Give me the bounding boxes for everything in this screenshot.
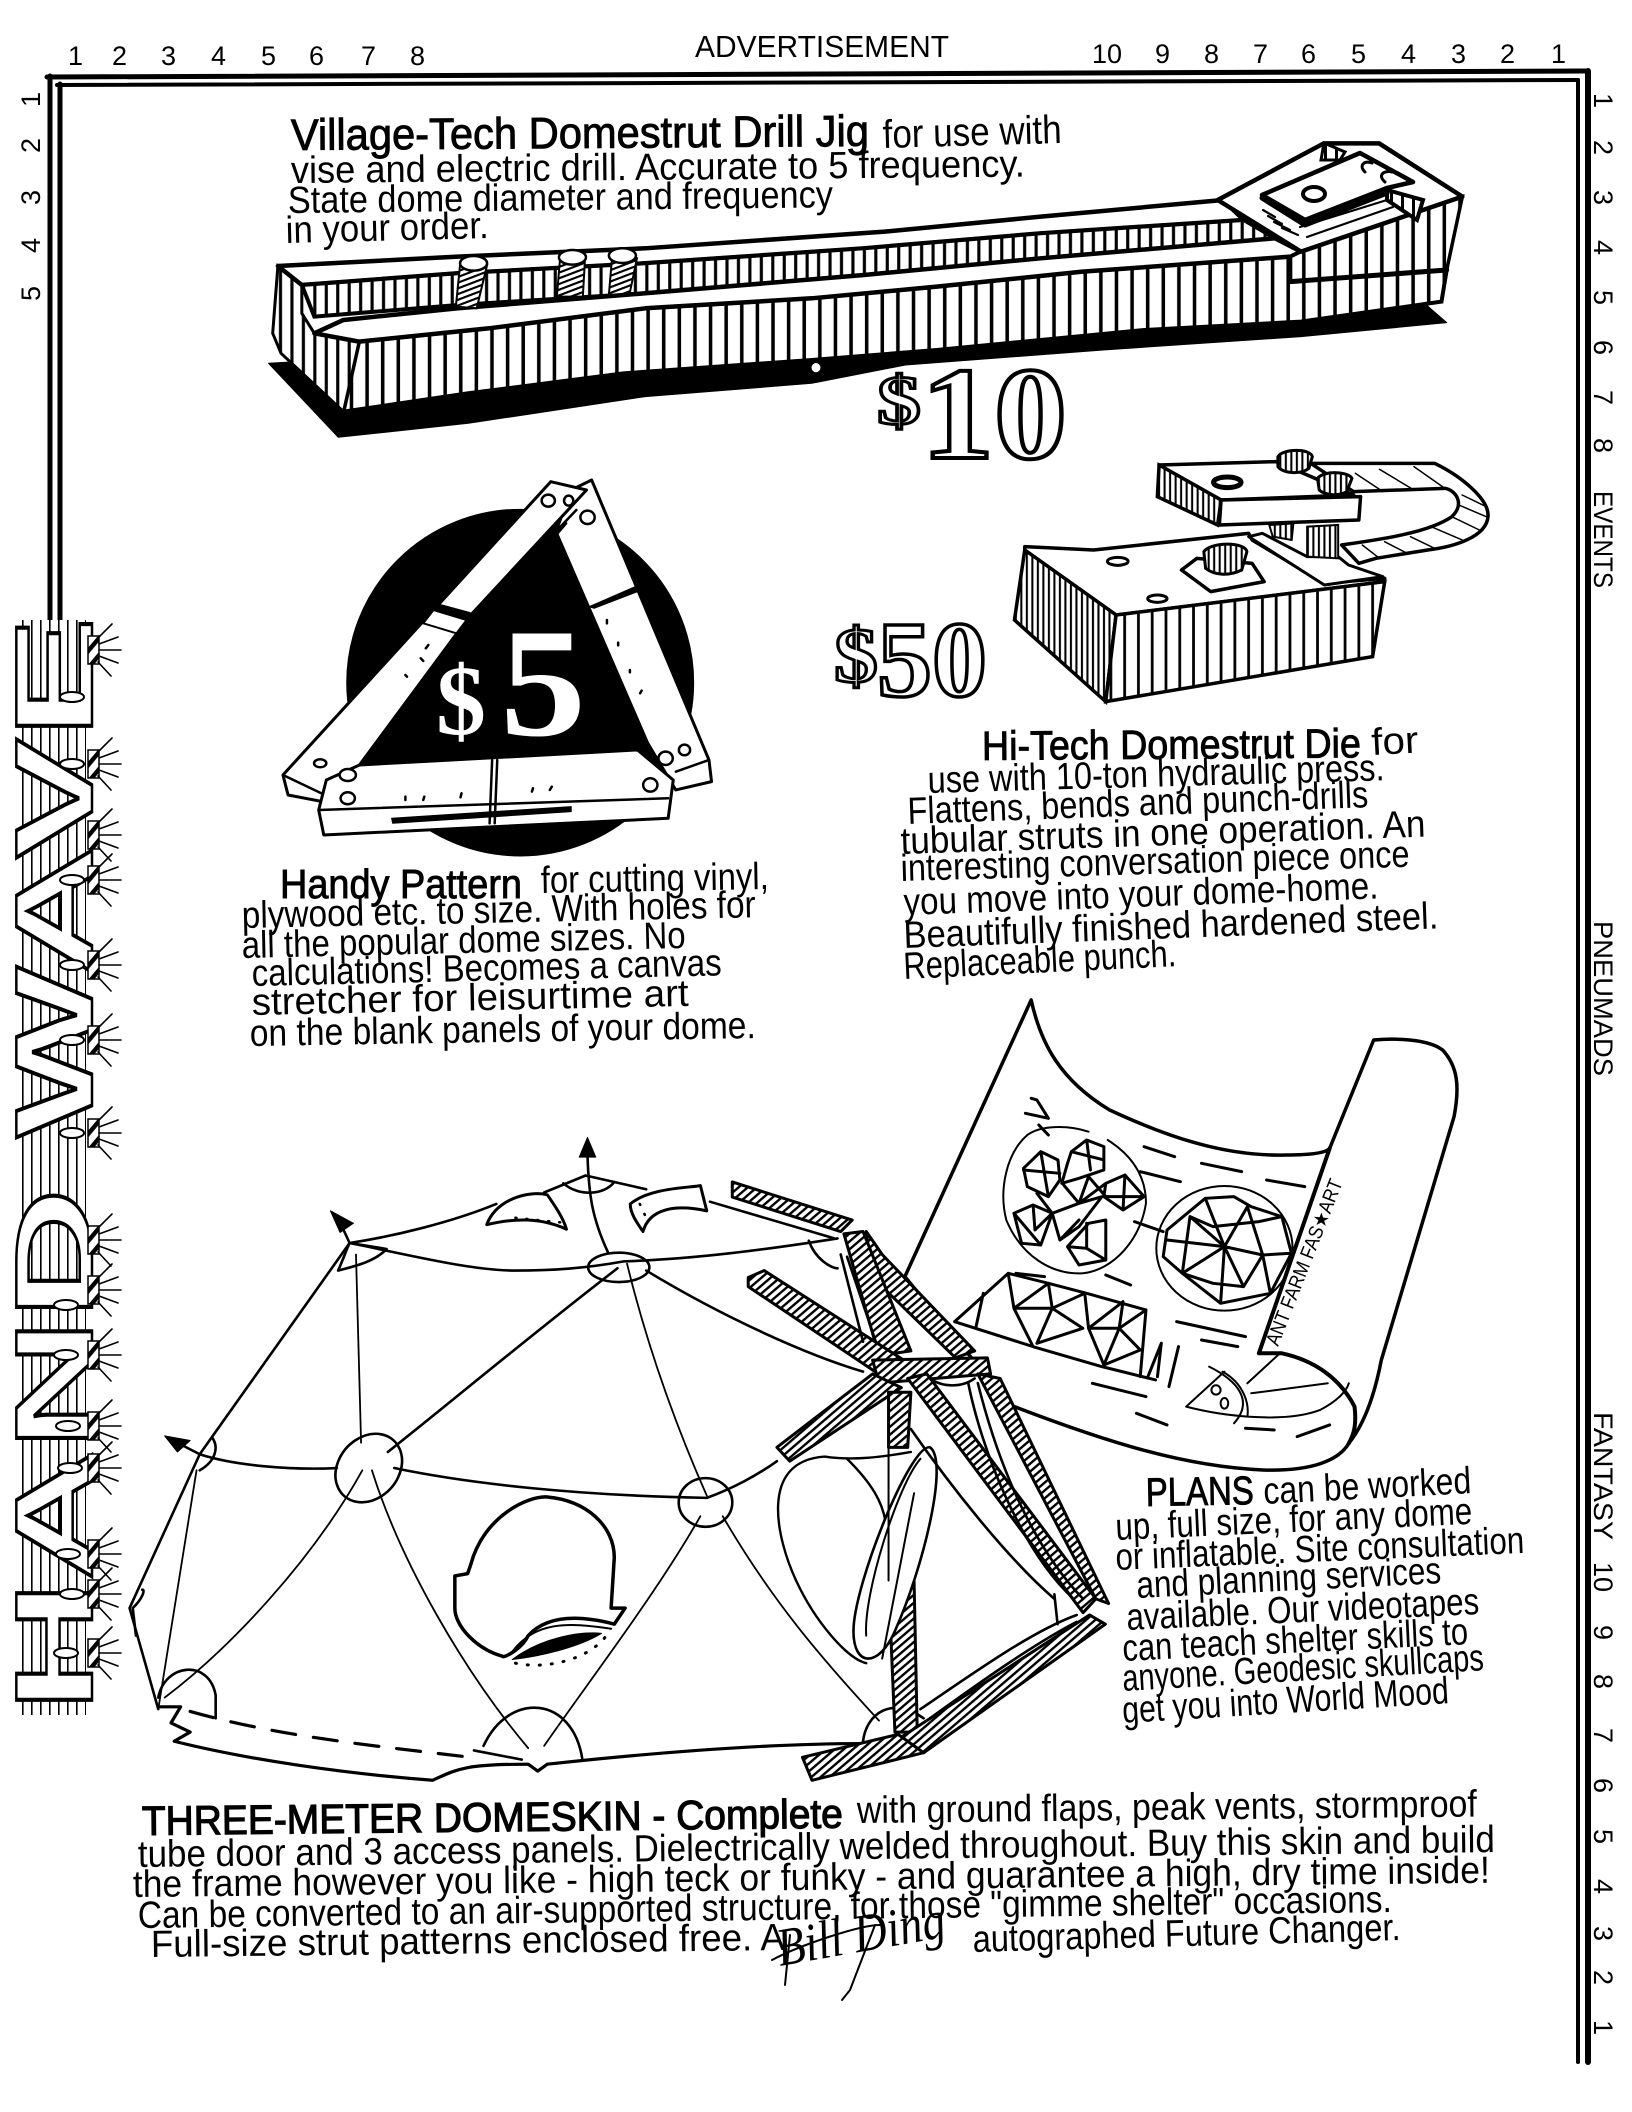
price: $50: 50 — [877, 601, 987, 720]
price: $5: $ — [436, 645, 486, 756]
ruler numbers: left side: 2 — [16, 138, 46, 153]
ruler numbers: top right: 3 — [1451, 39, 1466, 69]
right side ruler with section names: 4 — [1588, 240, 1618, 255]
right side ruler with section names: 5 — [1588, 1829, 1618, 1844]
ruler numbers: top right: 10 — [1092, 39, 1122, 69]
heading and text: drill jig — [285, 107, 1062, 252]
right side ruler with section names: 1 — [1588, 2020, 1618, 2035]
text: plans: anyone. Geodesic skullcaps — [1121, 1637, 1485, 1700]
text: plans: or inflatable. Site consultation — [1115, 1520, 1525, 1579]
illustration: drill jig — [269, 143, 1462, 437]
text: hi-tech die: you move into your dome-home. — [903, 865, 1379, 924]
price: $50: $ — [834, 612, 878, 699]
ruler numbers: top right: 1 — [1551, 39, 1566, 69]
price: $5 — [436, 597, 586, 769]
panel opening and oval — [778, 1452, 911, 1663]
ruler numbers: top right: 6 — [1301, 39, 1316, 69]
text: three-meter domeskin: Can be converted to an air-supported structure, for those "gimme shelter" occasions. — [138, 1879, 1392, 1937]
heading and text: drill jig: in your order. — [285, 205, 489, 252]
right side ruler with section names: 9 — [1588, 1625, 1618, 1640]
right side ruler with section names: 6 — [1588, 340, 1618, 355]
right side ruler with section names: EVENTS — [1588, 491, 1618, 588]
text: three-meter domeskin: with ground flaps, peak vents, stormproof — [856, 1784, 1477, 1832]
dome door — [455, 1497, 625, 1665]
ruler numbers: top left: 3 — [161, 41, 176, 71]
right side ruler with section names: 2 — [1588, 1970, 1618, 1985]
ruler numbers: top left: 4 — [211, 41, 226, 71]
text: three-meter domeskin: the frame however you like - high teck or funky - and guarantee a high, dry time inside! — [133, 1850, 1490, 1906]
ruler numbers: top left: 1 — [68, 41, 83, 71]
text: three-meter domeskin: THREE-METER DOMESKIN - Complete — [142, 1791, 843, 1844]
ruler numbers: top right: 7 — [1253, 39, 1268, 69]
text: plans: can be worked — [1262, 1460, 1472, 1513]
right side ruler with section names: FANTASY — [1588, 1412, 1618, 1540]
text: plans — [1115, 1460, 1525, 1732]
right side ruler with section names: 5 — [1588, 290, 1618, 305]
ruler numbers: top right: 5 — [1351, 39, 1366, 69]
ruler numbers: left side: 1 — [16, 92, 46, 107]
peak vents and arrows — [165, 1137, 707, 1454]
right side ruler with section names: 6 — [1588, 1778, 1618, 1793]
text: three-meter domeskin — [133, 1784, 1495, 2000]
right side ruler with section names: 8 — [1588, 1674, 1618, 1689]
right side ruler with section names: PNEUMADS — [1588, 921, 1618, 1076]
strut frame — [732, 1182, 1109, 1780]
price: $10: 10 — [921, 340, 1067, 487]
text: plans: available. Our videotapes — [1126, 1581, 1480, 1639]
text: three-meter domeskin: tube door and 3 access panels. Dielectrically welded throughout. Buy this skin and build — [138, 1819, 1495, 1876]
ruler numbers: left side: 4 — [16, 238, 46, 253]
text: handy pattern: Handy Pattern — [280, 861, 522, 907]
text: hi-tech die: interesting conversation piece once — [900, 834, 1410, 890]
text: plans: get you into World Mood — [1121, 1670, 1450, 1732]
illustration: handy pattern — [283, 480, 712, 856]
illustration: hi-tech die — [1014, 450, 1488, 702]
text: plans: can teach shelter skills to — [1121, 1611, 1469, 1670]
heading and text: drill jig: for use with — [882, 108, 1062, 157]
right side ruler with section names: 10 — [1588, 1562, 1618, 1592]
ruler numbers: top right: 8 — [1204, 39, 1219, 69]
right side ruler with section names: 2 — [1588, 140, 1618, 155]
ruler numbers: top right — [1092, 39, 1566, 69]
text: three-meter domeskin: Full-size strut patterns enclosed free. A — [151, 1917, 786, 1966]
text: hi-tech die: Replaceable punch. — [902, 933, 1177, 988]
heading and text: drill jig: vise and electric drill. Accurate to 5 frequency. — [291, 144, 1025, 192]
ruler numbers: left side: 5 — [16, 286, 46, 301]
text: hi-tech die: for — [1370, 720, 1420, 764]
text: handy pattern: all the popular dome sizes. No — [241, 915, 686, 967]
right side ruler with section names: 3 — [1588, 1926, 1618, 1941]
oval access panel — [853, 1447, 937, 1659]
text: hi-tech die: tubular struts in one operation. An — [900, 804, 1426, 863]
ruler numbers: top right: 9 — [1155, 39, 1170, 69]
text: three-meter domeskin: autographed Future Changer. — [972, 1907, 1401, 1961]
plan drawing: dome net — [955, 1098, 1349, 1437]
price: $5: 5 — [500, 597, 586, 769]
ruler numbers: top left: 5 — [261, 41, 276, 71]
right side ruler with section names: 1 — [1588, 93, 1618, 108]
heading and text: drill jig: State dome diameter and frequency — [288, 174, 833, 222]
ruler numbers: top left — [68, 41, 425, 71]
text: hi-tech die — [900, 720, 1439, 988]
ruler numbers: left side: 3 — [16, 190, 46, 205]
text: handy pattern: on the blank panels of your dome. — [249, 1005, 756, 1055]
signature: Bill Ding: Bill Ding — [772, 1889, 950, 1978]
jig clamp plate — [1262, 143, 1423, 237]
right side ruler with section names: 4 — [1588, 1879, 1618, 1894]
price: $10 — [877, 340, 1067, 487]
right side ruler with section names: 8 — [1588, 438, 1618, 453]
pins on jig — [456, 248, 637, 308]
side logotype: HAND WAVE — [0, 617, 121, 1715]
right side ruler with section names: 3 — [1588, 190, 1618, 205]
ruler numbers: top left: 6 — [309, 41, 324, 71]
text: hi-tech die: Hi-Tech Domestrut Die — [982, 720, 1361, 769]
text: handy pattern: stretcher for leisurtime art — [251, 973, 690, 1024]
signature: Bill Ding — [772, 1889, 950, 2000]
text: hi-tech die: use with 10-ton hydraulic press. — [927, 747, 1385, 802]
illustration: three-meter domeskin — [130, 1137, 1109, 1780]
ruler numbers: top right: 4 — [1401, 39, 1416, 69]
text: handy pattern: for cutting vinyl, — [540, 856, 769, 902]
ruler numbers: top left: 2 — [112, 41, 127, 71]
text: handy pattern: plywood etc. to size. With holes for — [241, 884, 756, 937]
illustration: plans scroll — [905, 1000, 1457, 1470]
text: handy pattern: calculations! Becomes a canvas — [251, 942, 722, 995]
ruler numbers: top left: 7 — [361, 41, 376, 71]
scroll label: ANT FARM FAS★ART: ANT FARM FAS★ART — [1262, 1176, 1348, 1349]
price: $10: $ — [877, 363, 921, 440]
text: plans: and planning services — [1135, 1550, 1442, 1607]
right side ruler with section names — [1588, 93, 1618, 2035]
text: hi-tech die: Beautifully finished hardened steel. — [903, 895, 1439, 957]
ruler numbers: left side — [16, 92, 46, 301]
text: plans: up, full size, for any dome — [1115, 1491, 1473, 1549]
text: handy pattern — [241, 856, 769, 1055]
ruler numbers: top left: 8 — [410, 41, 425, 71]
right side ruler with section names: 7 — [1588, 390, 1618, 405]
ruler numbers: top right: 2 — [1500, 39, 1515, 69]
heading and text: drill jig: Village-Tech Domestrut Drill Jig — [291, 107, 869, 160]
right side ruler with section names: 7 — [1588, 1728, 1618, 1743]
text: hi-tech die: Flattens, bends and punch-drills — [907, 774, 1369, 833]
text: plans: PLANS — [1145, 1469, 1254, 1515]
page header: advertisement: ADVERTISEMENT — [695, 29, 949, 64]
